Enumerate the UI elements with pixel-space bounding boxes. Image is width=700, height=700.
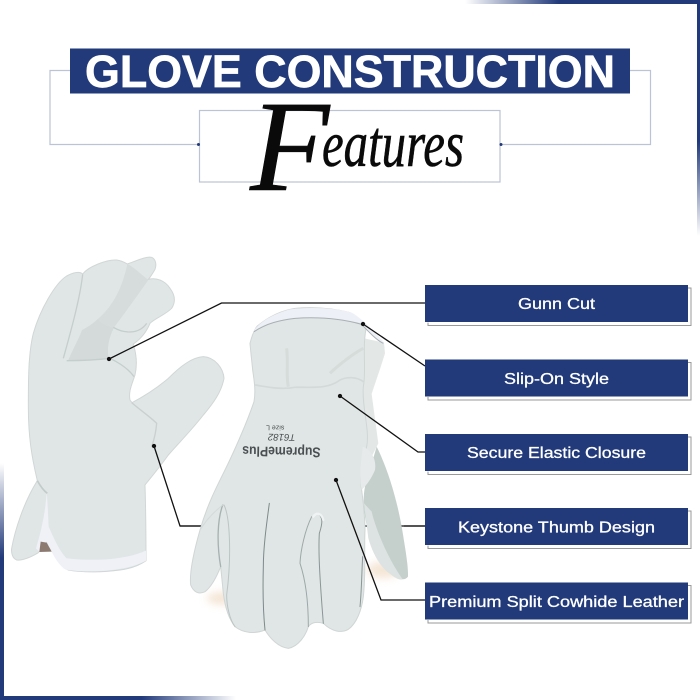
corner border: bottom left — [0, 463, 236, 700]
leader line: Gunn Cut — [108, 303, 425, 360]
subtitle: Features: F — [249, 75, 331, 219]
glove body — [190, 308, 367, 648]
leader line: Secure Elastic Closure — [338, 394, 425, 452]
label: Secure Elastic Closure — [425, 434, 691, 474]
elastic band — [253, 308, 384, 343]
back-of-hand darker panel — [364, 447, 408, 579]
cuff binding — [36, 492, 146, 571]
gap between fingers — [68, 319, 114, 360]
corner border: top right — [465, 0, 700, 236]
label: Keystone Thumb Design: Keystone Thumb Design — [458, 520, 655, 536]
right glove photo — [190, 308, 408, 648]
thumb base patch — [360, 447, 375, 490]
subtitle: Features: eatures — [322, 108, 464, 181]
inner cuff shade — [39, 542, 52, 552]
left glove photo — [12, 257, 224, 572]
label: Keystone Thumb Design — [425, 508, 691, 548]
finger seams — [200, 503, 363, 630]
leader line: Keystone end — [404, 525, 425, 527]
cuff inner side — [353, 337, 385, 477]
brand print: SupremePlus: SupremePlus — [242, 443, 321, 461]
label: Gunn Cut — [425, 285, 691, 326]
wrist gathers — [255, 378, 363, 388]
leader line: Premium Split Cowhide Leather — [334, 478, 425, 600]
leader segment: Keystone over palm — [152, 444, 202, 526]
warm floor shadows — [207, 562, 400, 605]
label: Secure Elastic Closure: Secure Elastic Closure — [467, 445, 646, 462]
brand print: SupremePlus: size L — [266, 423, 284, 431]
finger folds — [63, 274, 147, 377]
leader line: Slip-On Style — [362, 322, 425, 366]
leader line: Keystone Thumb Design — [180, 525, 425, 527]
label: Premium Split Cowhide Leather — [425, 582, 691, 623]
thumb edge strip — [364, 503, 403, 580]
label: Gunn Cut: Gunn Cut — [518, 296, 596, 313]
brand print: SupremePlus: T6182 — [267, 431, 295, 442]
brand print: SupremePlus — [242, 423, 321, 461]
label: Premium Split Cowhide Leather: Premium Split Cowhide Leather — [429, 594, 685, 611]
label: Slip-On Style — [425, 360, 691, 400]
header frame — [50, 70, 650, 182]
label: Slip-On Style: Slip-On Style — [504, 371, 609, 388]
title banner: GLOVE CONSTRUCTION — [85, 46, 615, 97]
